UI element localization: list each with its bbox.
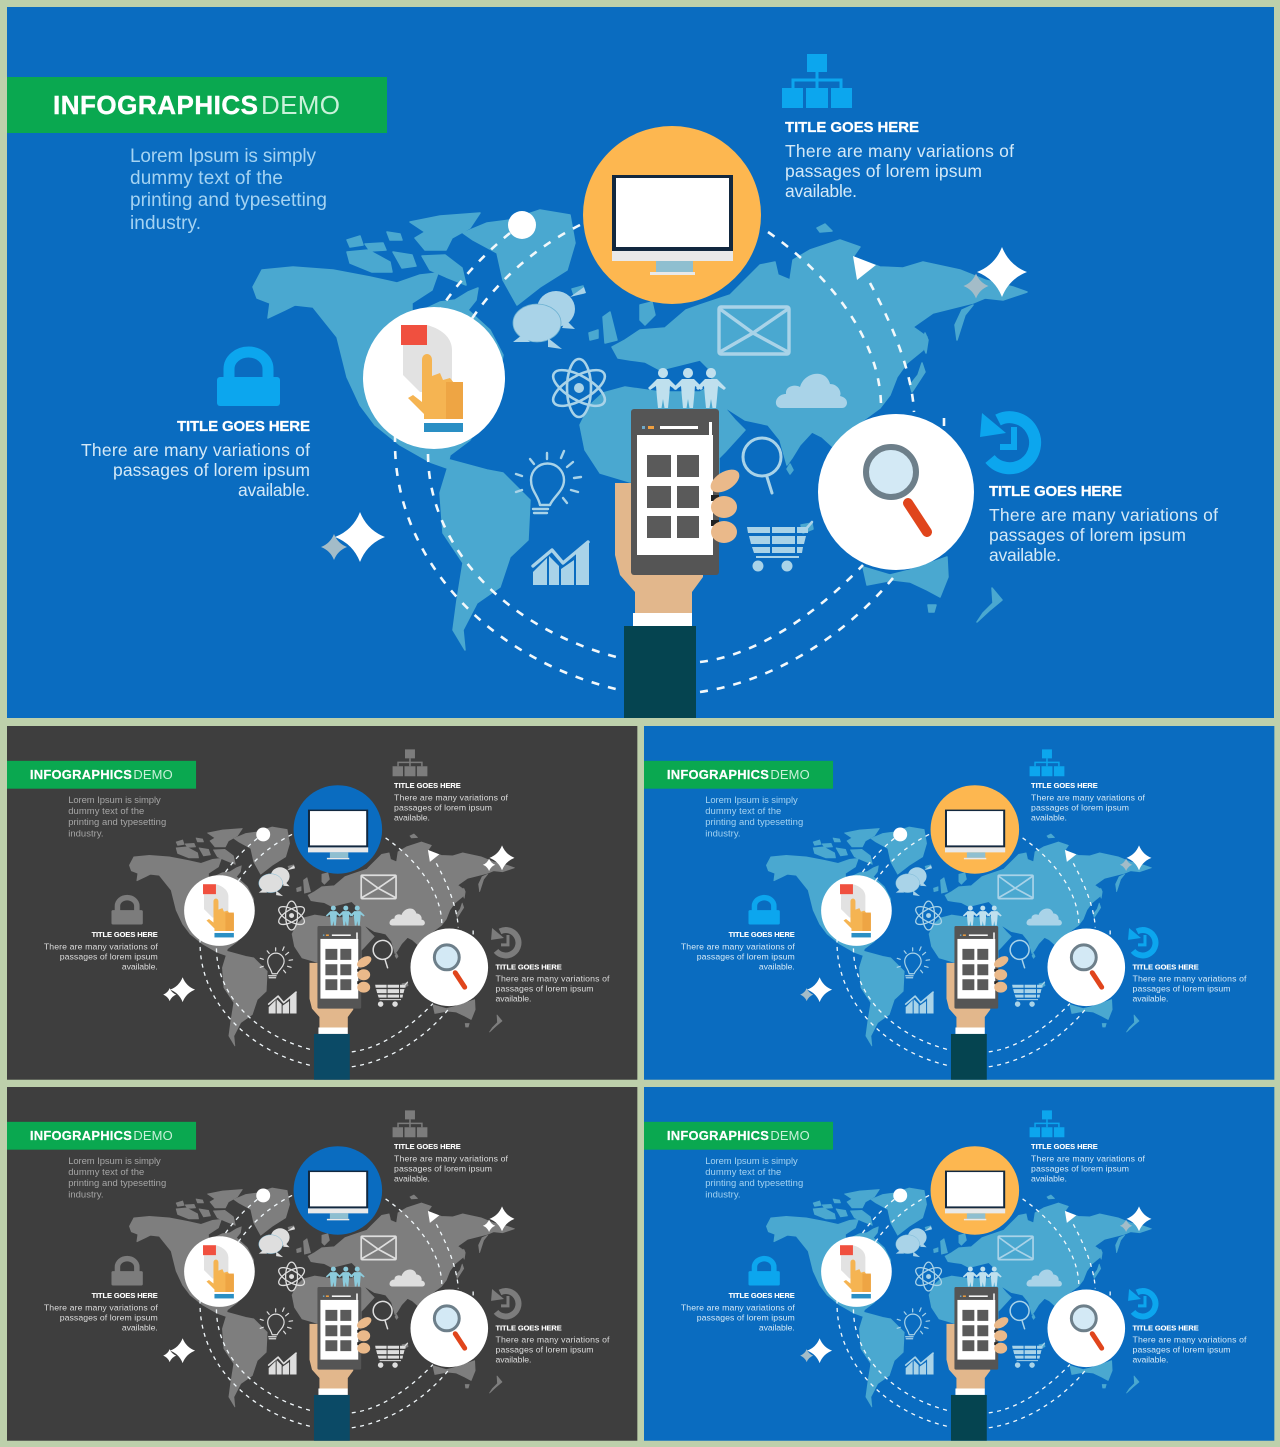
text block: right: available.: [496, 1355, 531, 1365]
icon: monitor circle: [294, 785, 382, 874]
intro text: printing and typesetting: [705, 817, 803, 828]
text block: left: TITLE GOES HERE: [729, 1291, 795, 1300]
panel: dark slide bottom left: [7, 1087, 637, 1441]
icon: history clock: [1128, 1289, 1155, 1316]
text block: top: There are many variations of: [394, 1154, 509, 1164]
text block: top: passages of lorem ipsum: [1031, 803, 1129, 813]
text block: left: TITLE GOES HERE: [92, 930, 158, 939]
icon: people: [326, 906, 365, 926]
text block: left: TITLE GOES HERE: [92, 1291, 158, 1300]
text block: left: There are many variations of: [81, 440, 310, 460]
intro text: [68, 1156, 166, 1200]
heading banner: INFOGRAPHICS: [30, 767, 132, 782]
text block: left: available.: [122, 961, 158, 971]
icon: monitor circle: [294, 1146, 382, 1235]
text block: top: [394, 1142, 509, 1184]
sparkle: bottom left: [800, 1338, 832, 1363]
intro text: industry.: [130, 213, 201, 234]
intro text: industry.: [705, 1189, 741, 1200]
text block: left: available.: [122, 1322, 158, 1332]
text block: top: passages of lorem ipsum: [785, 161, 982, 181]
icon: tapping hand circle: [821, 1236, 892, 1307]
text block: left: There are many variations of: [681, 1302, 795, 1312]
icon: envelope: [998, 875, 1033, 899]
intro text: printing and typesetting: [705, 1178, 803, 1189]
icon: org chart: [393, 749, 427, 776]
icon: magnifier circle: [410, 1289, 488, 1367]
text block: top: There are many variations of: [785, 141, 1014, 161]
text block: right: [496, 1323, 610, 1365]
icon: envelope: [719, 307, 789, 354]
icon: small magnifier: [373, 1301, 392, 1329]
text block: right: There are many variations of: [496, 1335, 610, 1345]
heading banner: [644, 761, 833, 789]
dashed orbit arcs: [837, 1195, 1110, 1428]
icon: padlock: [748, 1259, 780, 1286]
text block: right: [1133, 1323, 1247, 1365]
dashed orbit arcs: [200, 1195, 473, 1428]
dashed orbit arcs: [837, 834, 1110, 1067]
icon: atom: [276, 1262, 307, 1291]
text block: left: There are many variations of: [44, 1302, 158, 1312]
icon: monitor circle: [931, 785, 1019, 874]
text block: top: available.: [394, 813, 430, 823]
text block: left: [44, 930, 158, 971]
icon: chat bubbles: [259, 865, 295, 896]
icon: shopping cart: [747, 522, 812, 572]
text block: left: [44, 1291, 158, 1332]
icon: history clock: [491, 1289, 518, 1316]
intro text: dummy text of the: [705, 806, 781, 817]
icon: org chart: [1030, 749, 1064, 776]
icon: cloud: [776, 374, 847, 408]
icon: envelope: [998, 1236, 1033, 1260]
world map: [766, 1188, 1151, 1407]
text block: top: [1031, 1142, 1146, 1184]
intro text: [130, 146, 327, 234]
intro text: dummy text of the: [705, 1167, 781, 1178]
icon: small magnifier: [1010, 1301, 1029, 1329]
intro text: industry.: [68, 828, 104, 839]
text block: top: [785, 119, 1014, 201]
text block: top: TITLE GOES HERE: [1031, 1142, 1098, 1151]
text block: right: There are many variations of: [989, 505, 1218, 525]
icon: chat bubbles: [513, 287, 586, 349]
icon: magnifier circle: [1047, 1289, 1125, 1367]
intro text: printing and typesetting: [68, 1178, 166, 1189]
dashed orbit arcs: [200, 834, 473, 1067]
icon: shopping cart: [1012, 982, 1044, 1007]
icon: small magnifier: [373, 940, 392, 968]
icon: atom: [276, 901, 307, 930]
panel: dark slide top left: [7, 726, 637, 1080]
heading banner: INFOGRAPHICS: [667, 767, 769, 782]
intro text: printing and typesetting: [68, 817, 166, 828]
intro text: Lorem Ipsum is simply: [705, 795, 798, 806]
icon: atom: [913, 1262, 944, 1291]
icon: history clock: [491, 928, 518, 955]
icon: monitor circle: [583, 126, 761, 304]
icon: cloud: [390, 908, 425, 926]
text block: top: [1031, 781, 1146, 823]
icon: org chart: [782, 54, 852, 108]
world map: [253, 210, 1027, 650]
text block: top: passages of lorem ipsum: [394, 803, 492, 813]
sparkle: top right: [1120, 1206, 1151, 1232]
icon: people: [963, 1267, 1002, 1286]
orbit markers: [893, 1188, 1076, 1223]
icon: people: [326, 1267, 365, 1286]
dashed orbit arcs: [395, 225, 944, 692]
heading banner: INFOGRAPHICS: [30, 1128, 132, 1143]
orbit markers: [508, 211, 876, 280]
icon: atom: [548, 359, 610, 417]
world map: [766, 827, 1151, 1046]
icon: org chart: [1030, 1110, 1064, 1137]
text block: right: [989, 483, 1218, 565]
intro text: Lorem Ipsum is simply: [68, 1156, 161, 1167]
icon: envelope: [361, 875, 396, 899]
text block: top: TITLE GOES HERE: [394, 781, 461, 790]
intro text: [705, 795, 803, 839]
text block: top: TITLE GOES HERE: [1031, 781, 1098, 790]
icon: tapping hand circle: [821, 875, 892, 946]
world map: [129, 1188, 514, 1407]
text block: right: available.: [1133, 994, 1168, 1004]
icon: padlock: [748, 898, 780, 925]
heading banner: [7, 77, 387, 133]
panel: main blue slide: [7, 7, 1274, 718]
icon: history clock: [980, 413, 1035, 468]
heading banner: DEMO: [770, 767, 810, 782]
icon: magnifier circle: [1047, 928, 1125, 1006]
icon: growth chart: [269, 1353, 297, 1375]
text block: right: [1133, 962, 1247, 1004]
hand holding phone: [309, 1287, 373, 1441]
sparkle: bottom left: [163, 977, 195, 1002]
text block: top: passages of lorem ipsum: [394, 1164, 492, 1174]
text block: right: available.: [1133, 1355, 1168, 1365]
icon: growth chart: [533, 542, 589, 585]
text block: top: TITLE GOES HERE: [394, 1142, 461, 1151]
text block: top: There are many variations of: [1031, 1154, 1146, 1164]
heading banner: DEMO: [133, 767, 173, 782]
icon: people: [963, 906, 1002, 926]
text block: right: There are many variations of: [1133, 974, 1247, 984]
icon: people: [648, 368, 726, 408]
icon: cloud: [1027, 1269, 1062, 1286]
heading banner: DEMO: [770, 1128, 810, 1143]
icon: chat bubbles: [896, 865, 932, 896]
text block: left: passages of lorem ipsum: [697, 951, 795, 961]
heading banner: [7, 1122, 196, 1150]
text block: right: TITLE GOES HERE: [496, 1323, 562, 1332]
icon: light bulb: [897, 947, 930, 978]
text block: top: available.: [394, 1174, 430, 1184]
intro text: industry.: [68, 1189, 104, 1200]
icon: history clock: [1128, 928, 1155, 955]
heading banner: DEMO: [133, 1128, 173, 1143]
icon: chat bubbles: [259, 1226, 295, 1257]
orbit markers: [893, 827, 1076, 862]
intro text: dummy text of the: [68, 1167, 144, 1178]
orbit markers: [256, 1188, 439, 1223]
text block: right: available.: [989, 545, 1061, 565]
text block: top: TITLE GOES HERE: [785, 119, 919, 136]
icon: growth chart: [269, 992, 297, 1014]
icon: light bulb: [260, 947, 293, 978]
icon: light bulb: [516, 451, 581, 513]
panel: blue slide bottom right: [644, 1087, 1274, 1441]
text block: top: passages of lorem ipsum: [1031, 1164, 1129, 1174]
heading banner: DEMO: [261, 90, 340, 120]
text block: top: [394, 781, 509, 823]
icon: org chart: [393, 1110, 427, 1137]
intro text: dummy text of the: [68, 806, 144, 817]
text block: left: available.: [759, 961, 795, 971]
icon: small magnifier: [1010, 940, 1029, 968]
text block: top: available.: [1031, 1174, 1067, 1184]
icon: small magnifier: [743, 438, 781, 493]
icon: magnifier circle: [818, 414, 974, 570]
world map: [129, 827, 514, 1046]
text block: right: passages of lorem ipsum: [496, 1345, 594, 1355]
text block: top: There are many variations of: [1031, 793, 1146, 803]
icon: light bulb: [897, 1308, 930, 1339]
intro text: [68, 795, 166, 839]
icon: shopping cart: [375, 1343, 407, 1368]
icon: light bulb: [260, 1308, 293, 1339]
text block: left: available.: [238, 480, 310, 500]
text block: right: There are many variations of: [1133, 1335, 1247, 1345]
text block: left: TITLE GOES HERE: [177, 418, 310, 435]
text block: top: There are many variations of: [394, 793, 509, 803]
sparkle: top right: [483, 845, 514, 871]
hand holding phone: [946, 926, 1010, 1080]
icon: cloud: [390, 1269, 425, 1286]
text block: right: There are many variations of: [496, 974, 610, 984]
text block: left: passages of lorem ipsum: [60, 951, 158, 961]
hand holding phone: [309, 926, 373, 1080]
text block: top: available.: [785, 181, 857, 201]
sparkle: bottom left: [321, 512, 385, 562]
sparkle: top right: [1120, 845, 1151, 871]
text block: top: available.: [1031, 813, 1067, 823]
text block: right: TITLE GOES HERE: [1133, 962, 1199, 971]
icon: growth chart: [906, 992, 934, 1014]
text block: right: passages of lorem ipsum: [1133, 984, 1231, 994]
text block: right: passages of lorem ipsum: [989, 525, 1186, 545]
panel: blue slide top right: [644, 726, 1274, 1080]
icon: tapping hand circle: [363, 307, 505, 449]
text block: right: available.: [496, 994, 531, 1004]
text block: left: passages of lorem ipsum: [60, 1312, 158, 1322]
text block: left: TITLE GOES HERE: [729, 930, 795, 939]
icon: shopping cart: [1012, 1343, 1044, 1368]
heading banner: INFOGRAPHICS: [667, 1128, 769, 1143]
heading banner: INFOGRAPHICS: [53, 90, 258, 120]
icon: padlock: [217, 352, 280, 406]
text block: left: available.: [759, 1322, 795, 1332]
intro text: Lorem Ipsum is simply: [68, 795, 161, 806]
icon: shopping cart: [375, 982, 407, 1007]
sparkle: bottom left: [163, 1338, 195, 1363]
sparkle: top right: [964, 247, 1027, 298]
hand holding phone: [615, 409, 743, 718]
icon: padlock: [111, 1259, 143, 1286]
orbit markers: [256, 827, 439, 862]
icon: tapping hand circle: [184, 1236, 255, 1307]
icon: growth chart: [906, 1353, 934, 1375]
icon: cloud: [1027, 908, 1062, 926]
sparkle: bottom left: [800, 977, 832, 1002]
intro text: Lorem Ipsum is simply: [130, 146, 316, 167]
heading banner: [7, 761, 196, 789]
text block: left: There are many variations of: [44, 941, 158, 951]
sparkle: top right: [483, 1206, 514, 1232]
hand holding phone: [946, 1287, 1010, 1441]
text block: left: [81, 418, 310, 500]
intro text: [705, 1156, 803, 1200]
icon: magnifier circle: [410, 928, 488, 1006]
text block: right: passages of lorem ipsum: [496, 984, 594, 994]
heading banner: [644, 1122, 833, 1150]
text block: right: TITLE GOES HERE: [496, 962, 562, 971]
text block: right: [496, 962, 610, 1004]
icon: padlock: [111, 898, 143, 925]
intro text: printing and typesetting: [130, 190, 327, 211]
text block: left: [681, 930, 795, 971]
icon: atom: [913, 901, 944, 930]
text block: right: TITLE GOES HERE: [989, 483, 1122, 500]
icon: monitor circle: [931, 1146, 1019, 1235]
intro text: dummy text of the: [130, 168, 283, 189]
intro text: industry.: [705, 828, 741, 839]
text block: left: [681, 1291, 795, 1332]
text block: right: passages of lorem ipsum: [1133, 1345, 1231, 1355]
icon: tapping hand circle: [184, 875, 255, 946]
icon: envelope: [361, 1236, 396, 1260]
text block: right: TITLE GOES HERE: [1133, 1323, 1199, 1332]
intro text: Lorem Ipsum is simply: [705, 1156, 798, 1167]
text block: left: passages of lorem ipsum: [113, 460, 310, 480]
icon: chat bubbles: [896, 1226, 932, 1257]
text block: left: passages of lorem ipsum: [697, 1312, 795, 1322]
text block: left: There are many variations of: [681, 941, 795, 951]
